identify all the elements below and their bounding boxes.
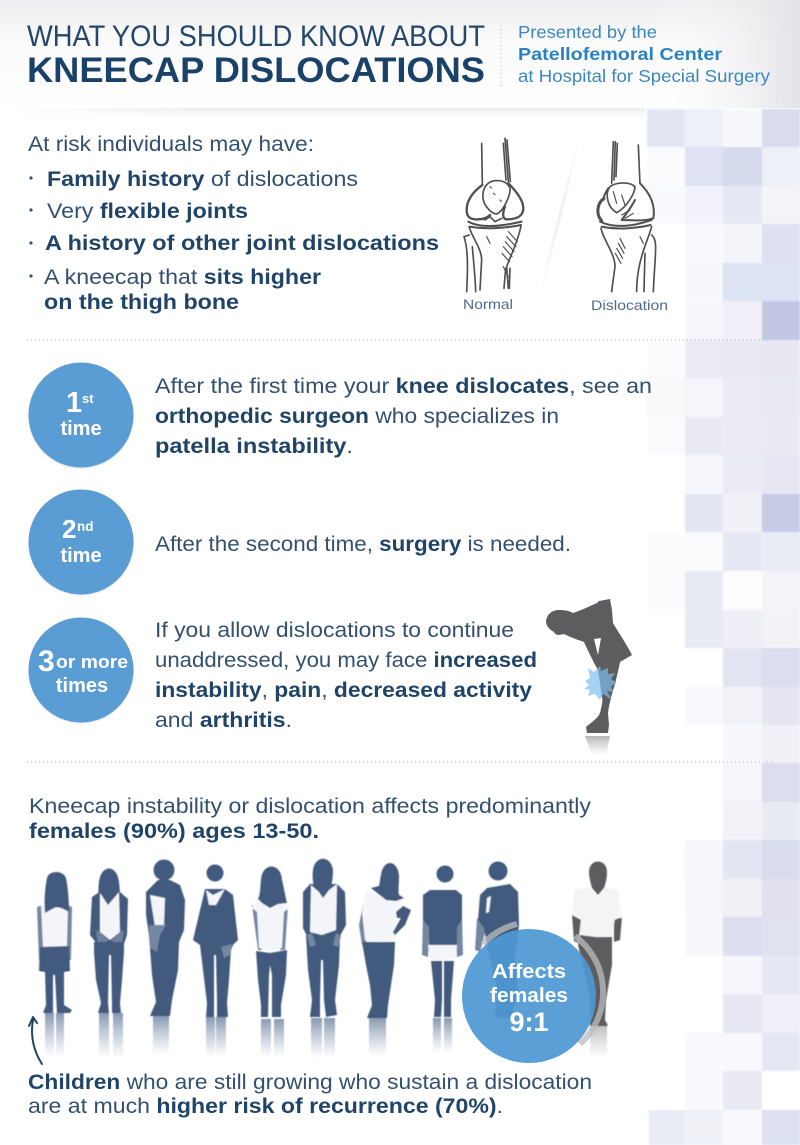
badge: 1st time: time	[60, 418, 102, 440]
figure 6	[303, 859, 346, 1058]
badge: 3 or more times: or more	[56, 652, 128, 672]
title	[27, 20, 485, 90]
section divider	[27, 761, 775, 763]
section divider	[27, 339, 775, 341]
title: KNEECAP DISLOCATIONS	[27, 51, 485, 90]
badge: 3 or more times	[28, 618, 134, 724]
second time text: After the second time, surgery is needed.	[155, 533, 571, 556]
third time text: instability , pain, decreased activity	[155, 679, 532, 702]
figure 7	[359, 863, 411, 1056]
first time text: After the first time your knee dislocates , see an	[155, 375, 652, 398]
children recurrence text: Children who are still growing who sustain a dislocation	[28, 1071, 592, 1094]
panel: first time	[28, 362, 652, 469]
risk list: A history of other joint dislocations	[45, 232, 439, 255]
presenter credit: Presented by the	[518, 22, 657, 42]
figure 9	[475, 862, 519, 1018]
risk list: Family history of dislocations	[47, 168, 358, 191]
panel: third time	[28, 599, 632, 755]
risk list: on the thigh bone	[44, 291, 239, 314]
figure 10: male	[572, 862, 622, 1058]
risk heading: At risk individuals may have:	[28, 133, 314, 156]
badge: 2nd time: nd	[77, 519, 94, 534]
badge: 2nd time	[28, 490, 134, 596]
panel: risk factors	[28, 133, 439, 314]
knee label: dislocation: Dislocation	[591, 297, 668, 313]
risk list: Very flexible joints	[47, 200, 248, 223]
knee label: normal: Normal	[463, 296, 513, 312]
demographics text: females (90%) ages 13-50.	[29, 820, 319, 843]
figure 5	[252, 866, 289, 1057]
background tile mosaic	[647, 109, 800, 1145]
first time text	[155, 375, 652, 458]
arrow: children callout	[29, 1017, 42, 1064]
badge: 2nd time: 2	[62, 514, 76, 544]
callout: affects females 9:1	[462, 924, 603, 1063]
presenter credit: at Hospital for Special Surgery	[518, 66, 770, 86]
figure 2	[90, 868, 128, 1058]
badge: 1st time	[28, 362, 134, 469]
figure 3	[146, 860, 185, 1054]
header divider	[500, 25, 502, 86]
badge: 2nd time: time	[60, 545, 102, 567]
panel: second time	[28, 490, 571, 596]
callout: affects females 9:1: 9:1	[509, 1007, 549, 1037]
demographics text: Kneecap instability or dislocation affects predominantly	[29, 795, 592, 818]
callout: affects females 9:1: females	[490, 985, 568, 1007]
callout: affects females 9:1: Affects	[492, 961, 566, 983]
knee diagram divider	[539, 137, 581, 293]
figure 4	[193, 864, 238, 1057]
third time text: and arthritis .	[155, 709, 292, 732]
children recurrence text	[28, 1071, 592, 1118]
first time text: orthopedic surgeon who specializes in	[155, 405, 559, 428]
badge: 1st time: 1	[66, 387, 82, 419]
risk list: A kneecap that sits higher	[44, 266, 321, 289]
risk list	[29, 168, 439, 314]
presenter credit: Patellofemoral Center	[518, 44, 722, 64]
icon: bent figure with knee pain	[546, 599, 632, 755]
figure 1: child	[37, 872, 72, 1057]
badge: 1st time: st	[82, 391, 94, 406]
badge: 3 or more times: times	[56, 675, 108, 697]
first time text: patella instability .	[155, 435, 353, 458]
third time text	[155, 619, 537, 732]
badge: 3 or more times: 3	[38, 645, 55, 678]
figure 8	[422, 866, 463, 1053]
knee illustration: dislocation	[598, 142, 656, 292]
title: WHAT YOU SHOULD KNOW ABOUT	[27, 20, 485, 53]
figure row: silhouettes	[37, 859, 622, 1058]
presenter credit	[518, 22, 770, 86]
demographics text	[29, 795, 592, 843]
children recurrence text: are at much higher risk of recurrence (70%) .	[28, 1095, 503, 1118]
knee illustration: normal	[464, 138, 523, 292]
header band	[0, 0, 800, 122]
third time text: unaddressed, you may face increased	[155, 649, 537, 672]
third time text: If you allow dislocations to continue	[155, 619, 514, 642]
